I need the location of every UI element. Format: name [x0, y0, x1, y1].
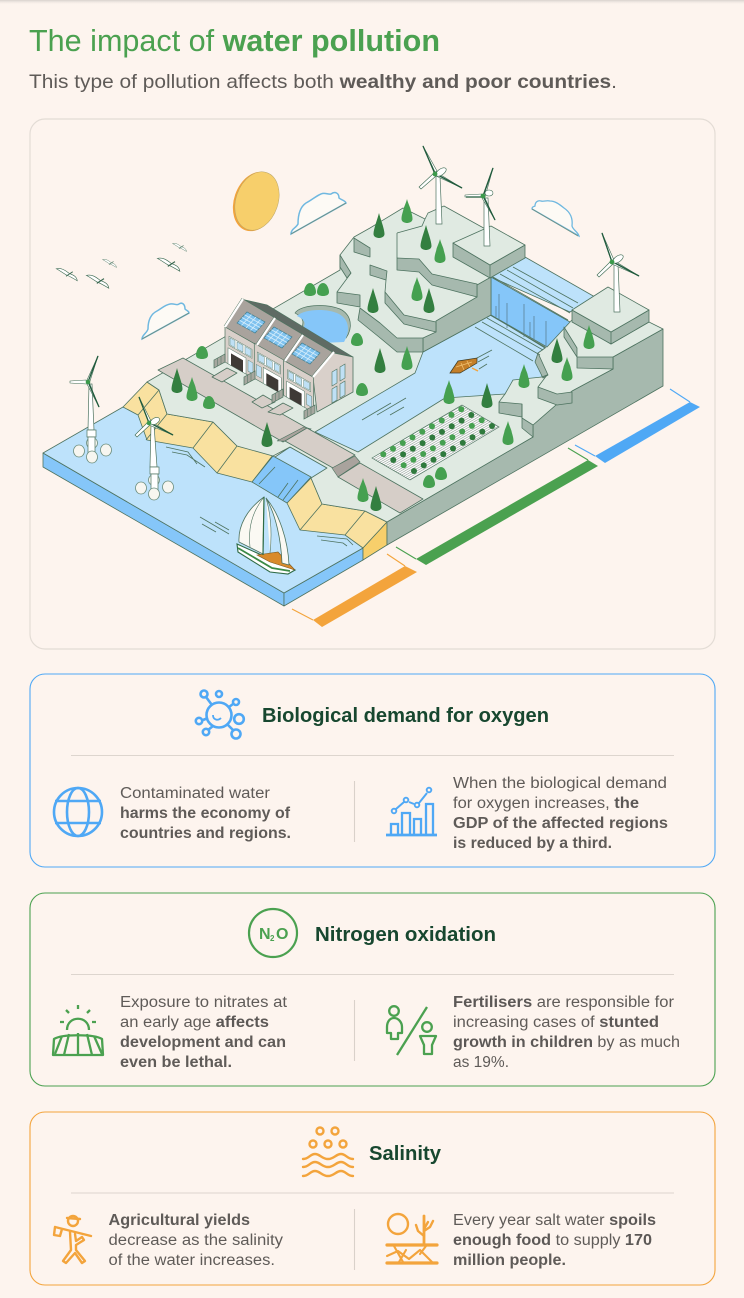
icon: dead tree on cracked soil [387, 1214, 437, 1263]
text: food: million people. [453, 1252, 566, 1269]
icon: globe [54, 788, 102, 836]
heading: Nitrogen oxidation [315, 924, 496, 946]
icon: field with sunrise [53, 1005, 103, 1055]
trees [172, 199, 594, 511]
icon: N2O: 2 [270, 934, 275, 943]
text: nitrates: an early age affects [120, 1014, 269, 1031]
cliff walls [337, 219, 613, 437]
icon: clouds [142, 193, 579, 339]
text: fertilisers [453, 994, 680, 1071]
ripples [166, 447, 353, 546]
swimming pool [295, 306, 350, 344]
text: economy: Contaminated water [120, 785, 270, 802]
text: nitrates: Exposure to nitrates at [120, 994, 288, 1011]
text: GDP: When the biological demand [453, 775, 667, 792]
crop field [372, 405, 499, 480]
text: GDP: GDP of the affected regions [453, 815, 668, 832]
icon: sun [225, 166, 287, 237]
sailboat [237, 497, 295, 574]
offshore wind turbine 2 [135, 397, 174, 500]
right side wall [387, 329, 663, 545]
icon: N2O: O [276, 926, 288, 943]
text: GDP [453, 775, 668, 852]
subtitle: This type of pollution affects both wealthy and poor countries . [29, 71, 617, 93]
text: food: enough food to supply 170 [453, 1232, 652, 1249]
text: fertilisers: Fertilisers are responsible for [453, 994, 674, 1011]
heading: Biological demand for oxygen [262, 705, 549, 727]
land surface [147, 206, 663, 522]
text: economy: countries and regions. [120, 825, 291, 842]
water slab [43, 407, 363, 606]
lock channel [252, 456, 311, 503]
wind turbine 3 [597, 233, 639, 312]
road and bridges [158, 358, 423, 513]
text: yields: of the water increases. [108, 1252, 275, 1269]
icon: N2O [249, 909, 297, 957]
heading: Salinity [369, 1143, 442, 1165]
houses with solar panels [214, 298, 353, 419]
panel: biological demand for oxygen [30, 674, 715, 867]
text: nitrates [120, 994, 288, 1071]
text: yields: Agricultural yields [108, 1212, 250, 1229]
panel: salinity [30, 1112, 715, 1285]
base scale bars [292, 389, 700, 627]
text: fertilisers: as 19%. [453, 1054, 509, 1071]
text: yields: decrease as the salinity [108, 1232, 283, 1249]
sand banks [123, 382, 387, 560]
text: yields [108, 1212, 283, 1269]
text: food [453, 1212, 656, 1269]
icon: N2O: N [259, 926, 271, 943]
text: nitrates: development and can [120, 1034, 286, 1051]
text: fertilisers: increasing cases of stunted [453, 1014, 659, 1031]
icon: microbe [196, 690, 244, 738]
icon: birds [56, 243, 186, 288]
panel: isometric landscape illustration [30, 119, 715, 649]
raised pads [453, 226, 649, 344]
offshore wind turbine 1 [70, 356, 112, 463]
icon: farmer with hoe [54, 1216, 91, 1263]
panel: nitrogen oxidation [30, 893, 715, 1086]
text: food: Every year salt water spoils [453, 1212, 656, 1229]
icon: salt over waves [303, 1128, 353, 1176]
icon: adult and child [387, 1006, 436, 1055]
text: economy [120, 785, 291, 842]
wind turbine 1 [419, 146, 462, 224]
river with dam [315, 257, 595, 452]
title: The impact of water pollution [29, 23, 440, 58]
text: GDP: is reduced by a third. [453, 835, 612, 852]
text: nitrates: even be lethal. [120, 1054, 232, 1071]
small rowing boat [450, 358, 478, 373]
text: GDP: for oxygen increases, the [453, 795, 639, 812]
text: fertilisers: growth in children by as much [453, 1034, 680, 1051]
text: economy: harms the economy of [120, 805, 291, 822]
wind turbine 2 [465, 168, 495, 246]
icon: chart [386, 788, 437, 835]
